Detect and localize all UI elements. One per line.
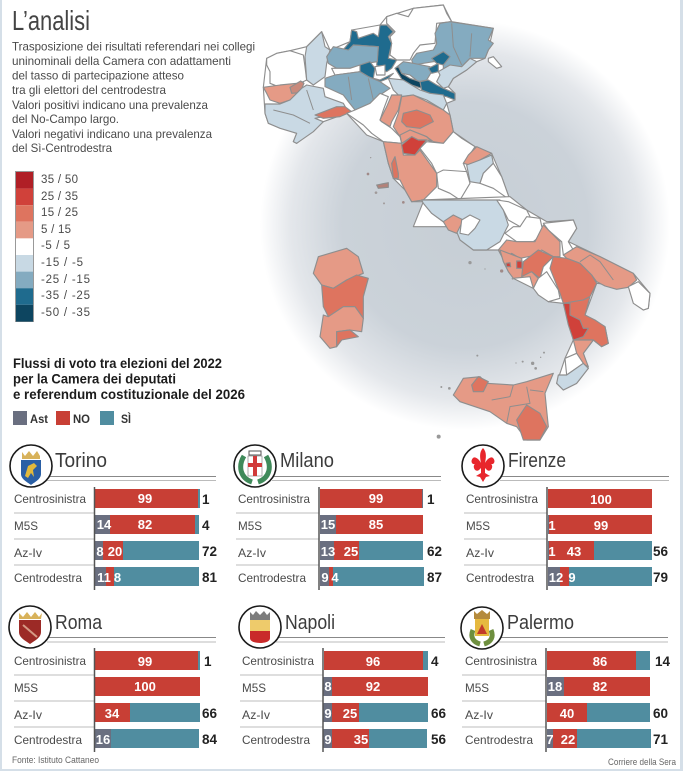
row: Centrodestra: Centrodestra: [14, 733, 82, 747]
panel: Milano: [234, 445, 442, 590]
row: Centrodestra: 11: [97, 570, 111, 585]
row: Centrodestra: 71: [653, 732, 669, 747]
intro text: del Sì-Centrodestra: [12, 141, 112, 155]
row: M5S: M5S: [14, 519, 38, 533]
row: M5S: [14, 515, 210, 534]
row: Centrosinistra: 99: [138, 654, 152, 669]
row: M5S: 85: [369, 517, 383, 532]
row: Az-Iv: Az-Iv: [466, 546, 494, 560]
row: Centrosinistra: [238, 489, 435, 508]
row: Centrosinistra: [242, 651, 439, 670]
row: Centrosinistra: [466, 489, 652, 508]
row: Az-Iv: [466, 541, 669, 560]
row: Centrosinistra: 1: [204, 654, 212, 669]
row: Centrosinistra: 14: [655, 654, 671, 669]
emblem: Firenze: [462, 445, 504, 487]
row: Az-Iv: [465, 703, 668, 722]
row: Centrodestra: Centrodestra: [14, 571, 82, 585]
row: Centrosinistra: 96: [366, 654, 380, 669]
panel: Firenze: [462, 445, 669, 590]
panel: Torino: [10, 445, 218, 590]
row: Az-Iv: 20: [108, 544, 122, 559]
emblem: Torino: [10, 445, 52, 487]
row: Centrodestra: 9: [568, 570, 576, 585]
row: Centrosinistra: Centrosinistra: [14, 492, 86, 506]
row: Centrosinistra: 99: [138, 491, 152, 506]
panel: Roma: [9, 606, 218, 752]
row: Centrosinistra: Centrosinistra: [238, 492, 310, 506]
intro text: Trasposizione dei risultati referendari nei collegi: [12, 40, 255, 54]
map legend: -25 / -15: [41, 274, 90, 286]
row: M5S: M5S: [238, 519, 262, 533]
map: northern and central Italy: [263, 5, 513, 227]
heading: Palermo: Palermo: [507, 612, 574, 634]
heading: Firenze: Firenze: [508, 450, 566, 472]
emblem: Milano: [234, 445, 276, 487]
row: M5S: 15: [321, 517, 335, 532]
map legend: 25 / 35: [41, 191, 78, 203]
row: M5S: [466, 515, 652, 534]
row: Centrodestra: Centrodestra: [466, 571, 534, 585]
row: Centrodestra: 22: [561, 732, 575, 747]
intro text: Valori negativi indicano una prevalenza: [12, 127, 212, 141]
row: Az-Iv: 66: [202, 706, 218, 721]
row: M5S: [238, 515, 423, 534]
row: Az-Iv: 8: [96, 544, 104, 559]
row: M5S: M5S: [465, 681, 489, 695]
map legend: -50 / -35: [41, 307, 90, 319]
row: Centrodestra: [465, 729, 669, 748]
row: Centrosinistra: [14, 489, 210, 508]
row: Az-Iv: 66: [431, 706, 447, 721]
row: Centrodestra: [238, 567, 442, 586]
map legend: 35 / 50: [41, 174, 78, 186]
row: Centrosinistra: 99: [369, 491, 383, 506]
row: Az-Iv: 40: [560, 706, 574, 721]
row: Centrosinistra: Centrosinistra: [466, 492, 538, 506]
row: M5S: 82: [593, 679, 607, 694]
row: Az-Iv: [14, 703, 218, 722]
row: Centrosinistra: Centrosinistra: [465, 654, 537, 668]
row: Centrodestra: 84: [202, 732, 218, 747]
row: Centrosinistra: 86: [593, 654, 607, 669]
intro text: [12, 40, 255, 155]
row: Az-Iv: 9: [324, 706, 332, 721]
flows heading: e referendum costituzionale del 2026: [13, 387, 245, 402]
row: Az-Iv: 34: [105, 706, 120, 721]
row: M5S: M5S: [242, 681, 266, 695]
panel: Palermo: [461, 607, 671, 752]
row: Centrodestra: 35: [354, 732, 368, 747]
intro text: tra gli elettori del centrodestra: [12, 83, 166, 97]
row: Centrodestra: 9: [324, 732, 332, 747]
flows heading: per la Camera dei deputati: [13, 372, 176, 386]
row: M5S: 82: [138, 517, 152, 532]
map legend: -15 / -5: [41, 257, 83, 269]
row: Az-Iv: Az-Iv: [238, 546, 266, 560]
row: Az-Iv: [14, 541, 217, 560]
row: Centrosinistra: Centrosinistra: [14, 654, 86, 668]
intro text: del tasso di partecipazione atteso: [12, 68, 184, 82]
row: Centrosinistra: 100: [590, 492, 612, 507]
heading: Torino: Torino: [55, 450, 107, 472]
row: M5S: [14, 677, 200, 696]
row: Centrodestra: 4: [331, 570, 339, 585]
row: M5S: [242, 677, 428, 696]
panel: Napoli: [239, 606, 447, 752]
row: Centrodestra: [466, 567, 668, 586]
intro text: Valori positivi indicano una prevalenza: [12, 98, 208, 112]
row: Centrosinistra: [14, 651, 212, 670]
row: Az-Iv: 60: [653, 706, 668, 721]
heading: Napoli: Napoli: [285, 612, 335, 634]
flows legend: Ast: [30, 412, 48, 426]
row: Centrosinistra: 1: [202, 492, 210, 507]
flows legend: NO: [73, 412, 90, 426]
map: southern Italy and islands: [313, 197, 650, 440]
heading: Milano: Milano: [280, 450, 334, 472]
row: Centrodestra: 8: [114, 570, 121, 585]
row: Az-Iv: 25: [344, 544, 358, 559]
row: Az-Iv: 13: [321, 544, 335, 559]
row: Az-Iv: Az-Iv: [14, 546, 42, 560]
row: M5S: M5S: [14, 681, 38, 695]
flows heading: [13, 356, 245, 402]
row: Centrodestra: Centrodestra: [242, 733, 310, 747]
map legend: 15 / 25: [41, 207, 78, 219]
row: Centrodestra: [14, 567, 218, 586]
intro text: del No-Campo largo.: [12, 112, 119, 126]
row: M5S: 100: [134, 679, 156, 694]
row: Az-Iv: Az-Iv: [465, 708, 493, 722]
emblem: Palermo: [461, 607, 503, 649]
row: Centrodestra: [14, 729, 218, 748]
row: Az-Iv: [242, 703, 447, 722]
flows legend: SÌ: [121, 411, 131, 426]
title: L’analisi: [12, 5, 90, 36]
row: Centrodestra: Centrodestra: [465, 733, 533, 747]
row: M5S: 4: [202, 518, 210, 533]
row: Az-Iv: 1: [548, 544, 556, 559]
map legend: -35 / -25: [41, 290, 90, 302]
row: M5S: 8: [324, 679, 332, 694]
row: M5S: 14: [97, 517, 112, 532]
row: M5S: 92: [366, 679, 380, 694]
source note: Fonte: Istituto Cattaneo: [12, 755, 99, 766]
map legend: [16, 172, 90, 322]
row: M5S: 1: [548, 518, 556, 533]
row: Az-Iv: 62: [427, 544, 442, 559]
row: M5S: [465, 677, 650, 696]
row: Centrosinistra: 4: [431, 654, 439, 669]
row: Centrosinistra: [465, 651, 671, 670]
row: Centrodestra: 79: [653, 570, 668, 585]
row: Az-Iv: Az-Iv: [14, 708, 42, 722]
heading: Roma: Roma: [55, 612, 103, 634]
row: Az-Iv: Az-Iv: [242, 708, 270, 722]
emblem: Napoli: [239, 606, 281, 648]
row: Az-Iv: 43: [567, 544, 581, 559]
row: Az-Iv: 25: [343, 706, 357, 721]
row: Az-Iv: [238, 541, 442, 560]
row: Centrosinistra: 1: [427, 492, 435, 507]
row: Centrodestra: 87: [427, 570, 442, 585]
row: Centrodestra: [242, 729, 447, 748]
row: Centrodestra: 12: [549, 570, 563, 585]
row: Centrodestra: 7: [546, 732, 554, 747]
row: M5S: 99: [594, 518, 608, 533]
flows heading: Flussi di voto tra elezioni del 2022: [13, 356, 222, 371]
flows legend: [13, 411, 131, 426]
row: Az-Iv: 72: [202, 544, 217, 559]
row: M5S: 18: [548, 679, 562, 694]
emblem: Roma: [9, 606, 51, 648]
row: Centrodestra: 56: [431, 732, 447, 747]
row: Centrodestra: 81: [202, 570, 218, 585]
intro text: uninominali della Camera con adattamenti: [12, 54, 231, 68]
row: Centrodestra: Centrodestra: [238, 571, 306, 585]
row: M5S: M5S: [466, 519, 490, 533]
map legend: -5 / 5: [41, 240, 70, 252]
row: Az-Iv: 56: [653, 544, 669, 559]
row: Centrodestra: 16: [96, 732, 110, 747]
row: Centrosinistra: Centrosinistra: [242, 654, 314, 668]
map legend: 5 / 15: [41, 224, 71, 236]
row: Centrodestra: 9: [321, 570, 329, 585]
